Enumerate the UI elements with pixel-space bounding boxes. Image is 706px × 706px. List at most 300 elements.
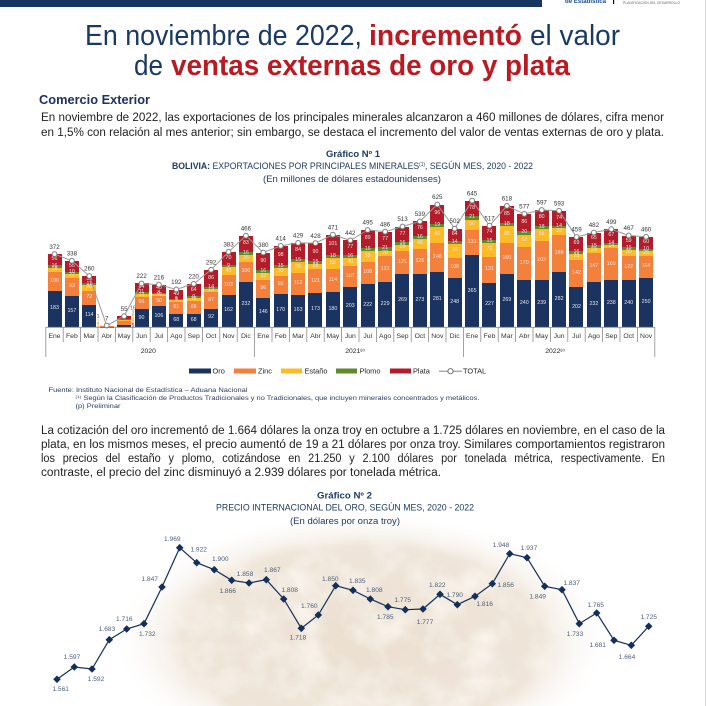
bars 2020: 11 <box>87 281 92 287</box>
bars 2020: 90 <box>139 315 144 321</box>
bars 2020: 8 <box>157 290 160 296</box>
total labels: 593 <box>554 200 565 208</box>
bars 2022: 15 <box>591 243 597 249</box>
bars 2022: 147 <box>589 263 598 269</box>
month labels: Abr <box>101 333 113 340</box>
month labels: Dic <box>241 333 251 340</box>
bars 2021: 108 <box>363 269 372 275</box>
gold price labels: 1.867 <box>264 567 281 574</box>
legend <box>189 366 486 376</box>
bars 2022: 33 <box>556 228 562 234</box>
month labels: Nov <box>222 333 235 340</box>
month labels: Sep <box>605 333 618 340</box>
bars 2020: 6 <box>175 296 178 302</box>
title: el valor <box>530 20 620 52</box>
bars 2021: 222 <box>363 302 372 308</box>
bars 2020: 9 <box>192 294 195 300</box>
total labels: 482 <box>589 222 600 229</box>
bars 2021: 131 <box>381 266 390 272</box>
bars 2022: 250 <box>642 299 651 305</box>
total labels: 292 <box>206 260 217 266</box>
small outside labels for Abr and May: 1 <box>97 314 100 320</box>
bars 2022: 78 <box>469 205 475 211</box>
chart 1 heading: , SEGÚN MES, 2020 - 2022 <box>425 161 533 171</box>
section heading: Comercio Exterior <box>39 92 150 107</box>
month labels: Jul <box>155 333 164 340</box>
gold price labels: 1.808 <box>366 587 383 594</box>
title: En noviembre de 2022, <box>85 20 362 52</box>
total labels: 372 <box>49 244 60 251</box>
bars 2021: 16 <box>417 234 423 240</box>
bars 2022: 59 <box>626 238 632 244</box>
bars 2020: 162 <box>224 307 233 313</box>
year labels: 2021 <box>345 348 360 355</box>
gold price labels: 1.733 <box>567 631 584 638</box>
bars 2021: 281 <box>433 296 442 302</box>
gold price labels: 1.850 <box>322 576 339 583</box>
total labels: 220 <box>189 274 199 280</box>
bars 2021: 16 <box>260 268 266 274</box>
chart 2 heading: Gráfico Nº 2 <box>317 490 372 500</box>
bars 2021: 32 <box>260 273 266 279</box>
month labels: Oct <box>206 333 216 340</box>
bars 2020: 64 <box>191 287 197 293</box>
gold price labels: 1.683 <box>99 626 116 633</box>
bars 2020: 13 <box>191 296 197 302</box>
bars 2021: 21 <box>382 245 388 251</box>
chart 1 heading <box>172 149 533 184</box>
bars 2020: 49 <box>173 291 179 297</box>
bars 2022: 165 <box>607 261 616 267</box>
source notes: Fuente: Instituto Nacional de Estadística – Aduana Nacional <box>48 387 248 394</box>
bars 2020: 40 <box>226 268 231 274</box>
bars 2022: 58 <box>539 231 545 237</box>
month labels: Oct <box>623 333 634 340</box>
total labels: 486 <box>380 222 391 228</box>
chart 1 heading: Gráfico Nº 1 <box>326 149 380 159</box>
legend: Estaño <box>304 366 328 376</box>
bars 2022: 80 <box>539 214 545 220</box>
bars 2022: 240 <box>624 300 633 306</box>
bars 2022: 142 <box>572 270 581 276</box>
bars 2022: 25 <box>643 250 649 256</box>
source notes: Según la Clasificación de Productos Tradicionales y no Tradicionales, que incluyen minerales concentrados y metálicos. <box>81 395 480 402</box>
bars 2020: 106 <box>154 313 163 319</box>
bars 2022: 18 <box>539 224 545 230</box>
month labels: Ene <box>48 333 61 340</box>
bars 2021: 269 <box>398 297 407 303</box>
bars 2020: 114 <box>85 312 94 318</box>
bars 2022: 114 <box>642 263 650 269</box>
bars 2022: 20 <box>521 229 527 235</box>
bars 2020: 70 <box>226 255 231 261</box>
gold price labels: 1.849 <box>529 594 546 600</box>
bars 2021: 15 <box>278 263 284 269</box>
bars 2022: 227 <box>485 301 494 307</box>
month labels: Abr <box>310 333 322 340</box>
paragraph: prices: plata, en los mismos meses, el precio aumentó de 19 a 21 dólares por onza troy. Similares comportamientos registraron <box>41 439 665 451</box>
legend: TOTAL <box>463 366 486 376</box>
bars 2020: 72 <box>86 294 92 300</box>
legend: Plata <box>413 366 431 376</box>
title <box>85 20 620 82</box>
chart 2 heading: (En dólares por onza troy) <box>290 516 400 526</box>
logo text: ministry: PLANIFICACIÓN DEL DESARROLLO <box>623 0 680 5</box>
gold price labels: 1.858 <box>237 571 254 578</box>
bars 2021: 76 <box>417 225 423 231</box>
bars 2021: 163 <box>294 307 303 313</box>
title: de <box>134 50 163 82</box>
total labels: 625 <box>432 194 443 201</box>
bars 2022: 15 <box>487 238 492 244</box>
legend: Oro <box>212 366 225 376</box>
bars 2021: 16 <box>347 253 353 259</box>
bars 2020: 16 <box>243 250 249 256</box>
bars 2020: 55 <box>69 263 75 269</box>
bars 2022: 10 <box>643 246 649 252</box>
bars 2020: 22 <box>69 272 75 278</box>
bars 2022 <box>465 201 653 327</box>
bars 2020: 18 <box>52 266 57 272</box>
gold price labels: 1.922 <box>190 546 207 554</box>
total labels: 517 <box>484 216 495 222</box>
bars 2020: 66 <box>191 304 197 310</box>
bars 2022: 202 <box>537 257 546 263</box>
bars 2021: 126 <box>415 258 424 264</box>
total labels: 55 <box>121 306 128 313</box>
bars 2022: 21 <box>469 214 475 220</box>
bars 2021: 90 <box>260 258 266 264</box>
logo text: ministry <box>613 0 680 5</box>
month labels: Oct <box>415 333 425 340</box>
legend: Zinc <box>258 366 272 376</box>
total labels: 222 <box>136 273 147 280</box>
bars 2022: 131 <box>485 266 494 272</box>
month labels: Ago <box>170 333 183 340</box>
total labels: 645 <box>467 190 478 198</box>
total labels: 597 <box>537 200 547 206</box>
bars 2022: 85 <box>504 231 510 237</box>
bars 2020 <box>48 236 253 328</box>
bars 2022: 122 <box>624 264 633 270</box>
bars 2022: 15 <box>626 245 632 251</box>
month labels: Ene <box>466 333 478 340</box>
total labels: 7 <box>105 316 109 322</box>
small outside labels for Abr and May: 1 <box>97 319 100 325</box>
total labels: 428 <box>310 233 321 240</box>
bars 2021: 28 <box>313 263 318 269</box>
bars 2022: 160 <box>502 255 511 261</box>
bars 2021: 18 <box>330 253 336 259</box>
total labels: 459 <box>571 226 582 234</box>
total labels: 466 <box>241 226 252 232</box>
bars 2020: 13 <box>139 292 144 298</box>
gold price labels: 1.765 <box>587 602 604 609</box>
title: incrementó <box>369 20 522 52</box>
bars 2022: 239 <box>537 300 546 306</box>
bars 2021: 90 <box>313 248 318 254</box>
bars 2022: 202 <box>572 304 581 310</box>
total labels: 471 <box>328 224 339 232</box>
bars 2021: 114 <box>329 277 337 283</box>
bars 2022: 16 <box>574 249 579 255</box>
total labels: 467 <box>624 225 634 232</box>
bars 2021: 16 <box>365 246 371 252</box>
bars 2020: 93 <box>69 283 75 289</box>
bars 2021: 80 <box>434 231 440 237</box>
bars 2020: 87 <box>208 297 214 303</box>
month labels: Mar <box>501 333 513 340</box>
gold price labels: 1.664 <box>619 654 636 661</box>
x axis <box>46 327 655 357</box>
bars 2022: 62 <box>521 237 527 243</box>
bars 2020: 68 <box>191 317 197 323</box>
bars 2020: 13 <box>208 287 214 293</box>
paragraph: prices <box>41 425 666 479</box>
total labels: 338 <box>67 250 78 258</box>
bars 2020: 44 <box>139 284 144 290</box>
chart 1 heading: BOLIVIA: EXPORTACIONES POR PRINCIPALES MINERALES <box>172 161 427 171</box>
gold price labels: 1.681 <box>589 642 606 649</box>
bars 2022: 269 <box>502 297 511 303</box>
total labels: 499 <box>606 219 617 226</box>
bars 2022: 74 <box>487 229 492 235</box>
month labels: Sep <box>396 333 409 340</box>
month labels: Mar <box>83 333 96 340</box>
total line with markers <box>52 198 648 328</box>
chart 2 heading: PRECIO INTERNACIONAL DEL ORO, SEGÚN MES, 2020 - 2022 <box>216 502 474 512</box>
legend: Plomo <box>360 366 380 376</box>
total labels: 414 <box>276 236 286 242</box>
gold price labels: 1.725 <box>640 614 657 621</box>
bars 2021: 16 <box>400 240 405 246</box>
month labels: Ene <box>257 333 270 340</box>
bars 2022: 85 <box>504 211 510 217</box>
bars 2021: 56 <box>295 264 301 270</box>
chart 1: exports by mineral <box>45 149 656 410</box>
month labels: Nov <box>640 333 653 340</box>
month labels: Ago <box>588 333 600 340</box>
bars 2020: 232 <box>241 301 250 307</box>
gold price labels <box>52 536 657 693</box>
bars 2020: 103 <box>224 282 233 288</box>
year labels: (p) <box>560 348 565 352</box>
bars 2021: 59 <box>365 253 371 259</box>
month labels <box>48 333 653 340</box>
bars 2022: 65 <box>591 235 597 241</box>
bars 2020: 56 <box>52 256 57 262</box>
bars 2020: 35 <box>243 255 249 261</box>
bars 2022: 30 <box>626 249 632 255</box>
gold price labels: 1.856 <box>497 582 514 589</box>
bars 2021: 58 <box>330 260 336 266</box>
gold price labels: 1.597 <box>64 654 81 661</box>
chart 1 heading: (1) <box>419 162 425 168</box>
paragraph: prices: contraste, el precio del zinc disminuyó a 2.939 dólares por tonelada métrica. <box>41 467 441 479</box>
gold price labels: 1.718 <box>290 634 307 642</box>
paragraph: exports: en 1,5% con relación al mes anterior; sin embargo, se destaca el incremento del valor de ventas externas de oro y plata. <box>41 127 664 139</box>
gold price labels: 1.948 <box>493 542 510 549</box>
gold price labels: 1.561 <box>52 686 69 693</box>
bars 2020: 16 <box>52 263 57 269</box>
bars 2021: 106 <box>450 264 459 270</box>
bars 2022: 50 <box>469 221 475 227</box>
bars 2021: 146 <box>259 309 268 315</box>
total labels: 618 <box>502 196 513 202</box>
bars 2020: 183 <box>50 305 59 311</box>
top band <box>0 0 542 7</box>
month labels: Jul <box>363 333 373 340</box>
month labels: Jun <box>554 333 565 340</box>
small outside labels for Abr and May: 3 <box>97 323 100 329</box>
bars 2021: 64 <box>452 231 458 237</box>
bars 2021: 77 <box>347 244 353 250</box>
bars 2021: 70 <box>452 247 458 253</box>
background: faded gold nugget <box>143 526 582 706</box>
month labels: Dic <box>450 333 460 340</box>
bars 2021: 14 <box>452 239 458 245</box>
bars 2020: 38 <box>86 276 92 282</box>
gold price labels: 1.732 <box>139 631 156 638</box>
bars 2021: 15 <box>313 259 318 265</box>
bars 2021: 173 <box>311 306 320 312</box>
bars 2022: 71 <box>487 246 492 252</box>
total labels: 429 <box>293 232 304 240</box>
total labels <box>49 190 652 322</box>
month labels: Feb <box>66 333 78 340</box>
year labels: 2020 <box>141 348 156 355</box>
bars 2021: 89 <box>365 235 371 241</box>
bars 2020: 40 <box>156 285 162 291</box>
year labels: 2022 <box>545 348 560 355</box>
bars 2020: 68 <box>173 317 179 323</box>
bars 2022: 189 <box>555 250 564 256</box>
total labels: 442 <box>345 230 356 237</box>
paragraph: exports <box>41 112 664 139</box>
bars 2021: 77 <box>400 231 405 237</box>
bars 2022: 14 <box>556 223 562 229</box>
bars 2021: 121 <box>398 259 407 265</box>
bars 2022: 74 <box>556 215 562 221</box>
gold price labels: 1.969 <box>164 536 181 543</box>
paragraph: exports: En noviembre de 2022, las exportaciones de los principales minerales alcanzaron a 460 millones de dólares, cifra menor <box>41 112 664 124</box>
bars 2021: 28 <box>382 250 388 256</box>
bars 2021: 48 <box>417 240 423 246</box>
month labels: Feb <box>484 333 496 340</box>
total labels: 513 <box>397 216 408 223</box>
month labels: Mar <box>292 333 305 340</box>
bars 2022: 14 <box>608 240 614 246</box>
bars 2020: 12 <box>156 292 162 298</box>
gold price labels: 1.847 <box>141 576 158 583</box>
bars 2020: 92 <box>208 314 214 320</box>
month labels: Ago <box>379 333 391 340</box>
total labels: 495 <box>363 220 373 226</box>
bars 2022: 131 <box>468 239 477 245</box>
page edge <box>705 0 706 706</box>
bars 2021: 148 <box>433 254 442 260</box>
bars 2022: 170 <box>520 260 529 266</box>
small outside labels for Abr and May: 8 <box>132 319 135 325</box>
total labels: 577 <box>519 204 530 210</box>
bars 2022: 23 <box>591 247 597 253</box>
bars 2022: 86 <box>521 219 527 225</box>
month labels: Jul <box>572 333 581 340</box>
bars 2020: 86 <box>208 275 214 281</box>
bars 2020: 83 <box>243 240 249 246</box>
bars 2020: 9 <box>227 263 230 269</box>
bars 2022: 282 <box>555 296 564 302</box>
month labels: Nov <box>431 333 444 340</box>
gold price labels: 1.785 <box>377 614 394 621</box>
source notes: (p) Preliminar <box>76 403 120 410</box>
total labels: 216 <box>154 274 165 282</box>
month labels: May <box>326 333 340 340</box>
bars 2021: 77 <box>382 236 388 242</box>
bars 2020: 100 <box>50 278 59 284</box>
small outside labels for Abr and May: 6 <box>132 315 135 321</box>
bars 2021: 273 <box>415 297 424 303</box>
gold price labels: 1.816 <box>476 601 493 608</box>
bars 2022: 232 <box>589 301 598 307</box>
bars 2020: 7 <box>175 297 178 303</box>
month labels: Jun <box>345 333 356 340</box>
bars 2022: 240 <box>520 300 529 306</box>
bars 2021: 229 <box>381 301 390 307</box>
bars 2022: 67 <box>608 232 614 238</box>
bars 2021: 15 <box>295 257 301 263</box>
bars 2020: 157 <box>67 308 76 314</box>
bars 2021: 19 <box>434 222 440 228</box>
total labels: 192 <box>171 279 182 286</box>
bars 2021: 248 <box>450 299 459 305</box>
bars 2020: 11 <box>139 289 144 295</box>
bars 2022: 69 <box>574 240 579 246</box>
bars 2022: 60 <box>643 239 649 245</box>
bars 2022: 238 <box>607 300 616 306</box>
gold price labels: 1.900 <box>212 556 229 563</box>
paragraph: prices: los precios del estaño y plomo, cotizándose en 21.250 y 2.100 dólares por tonelada métrica, respectivamente. En <box>41 453 665 465</box>
title: ventas externas de oro y plata <box>171 50 571 82</box>
bars 2021 <box>256 205 462 327</box>
small outside labels for Abr and May <box>97 306 136 329</box>
paragraph: prices: La cotización del oro incrementó de 1.664 dólares la onza troy en octubre a 1.725 dólares en noviembre, en el caso de la <box>41 425 666 437</box>
total labels: 539 <box>415 211 426 218</box>
bars 2022: 365 <box>468 288 477 294</box>
month labels: Sep <box>188 333 200 340</box>
gold price line <box>57 548 649 679</box>
gold price labels: 1.790 <box>446 592 463 599</box>
bars 2021: 29 <box>400 244 405 250</box>
month labels: May <box>535 333 549 340</box>
chart 2 heading <box>216 490 474 526</box>
gold price labels: 1.760 <box>301 603 318 610</box>
gold price labels: 1.835 <box>349 578 366 585</box>
gold price labels: 1.937 <box>521 545 538 552</box>
chart 1 heading: (En millones de dólares estadounidenses) <box>263 174 441 184</box>
bars 2022: 14 <box>608 243 614 249</box>
year labels: (p) <box>360 348 365 352</box>
gold price labels: 1.837 <box>563 580 580 587</box>
total labels: 383 <box>223 242 234 248</box>
total labels: 260 <box>84 266 95 272</box>
source notes: (1) <box>76 394 82 399</box>
bars 2021: 92 <box>278 281 284 287</box>
gold price labels: 1.808 <box>281 587 298 594</box>
bars 2021: 96 <box>434 210 440 216</box>
chart 2: gold price <box>52 490 657 706</box>
small outside labels for Abr and May: 2 <box>132 310 135 316</box>
